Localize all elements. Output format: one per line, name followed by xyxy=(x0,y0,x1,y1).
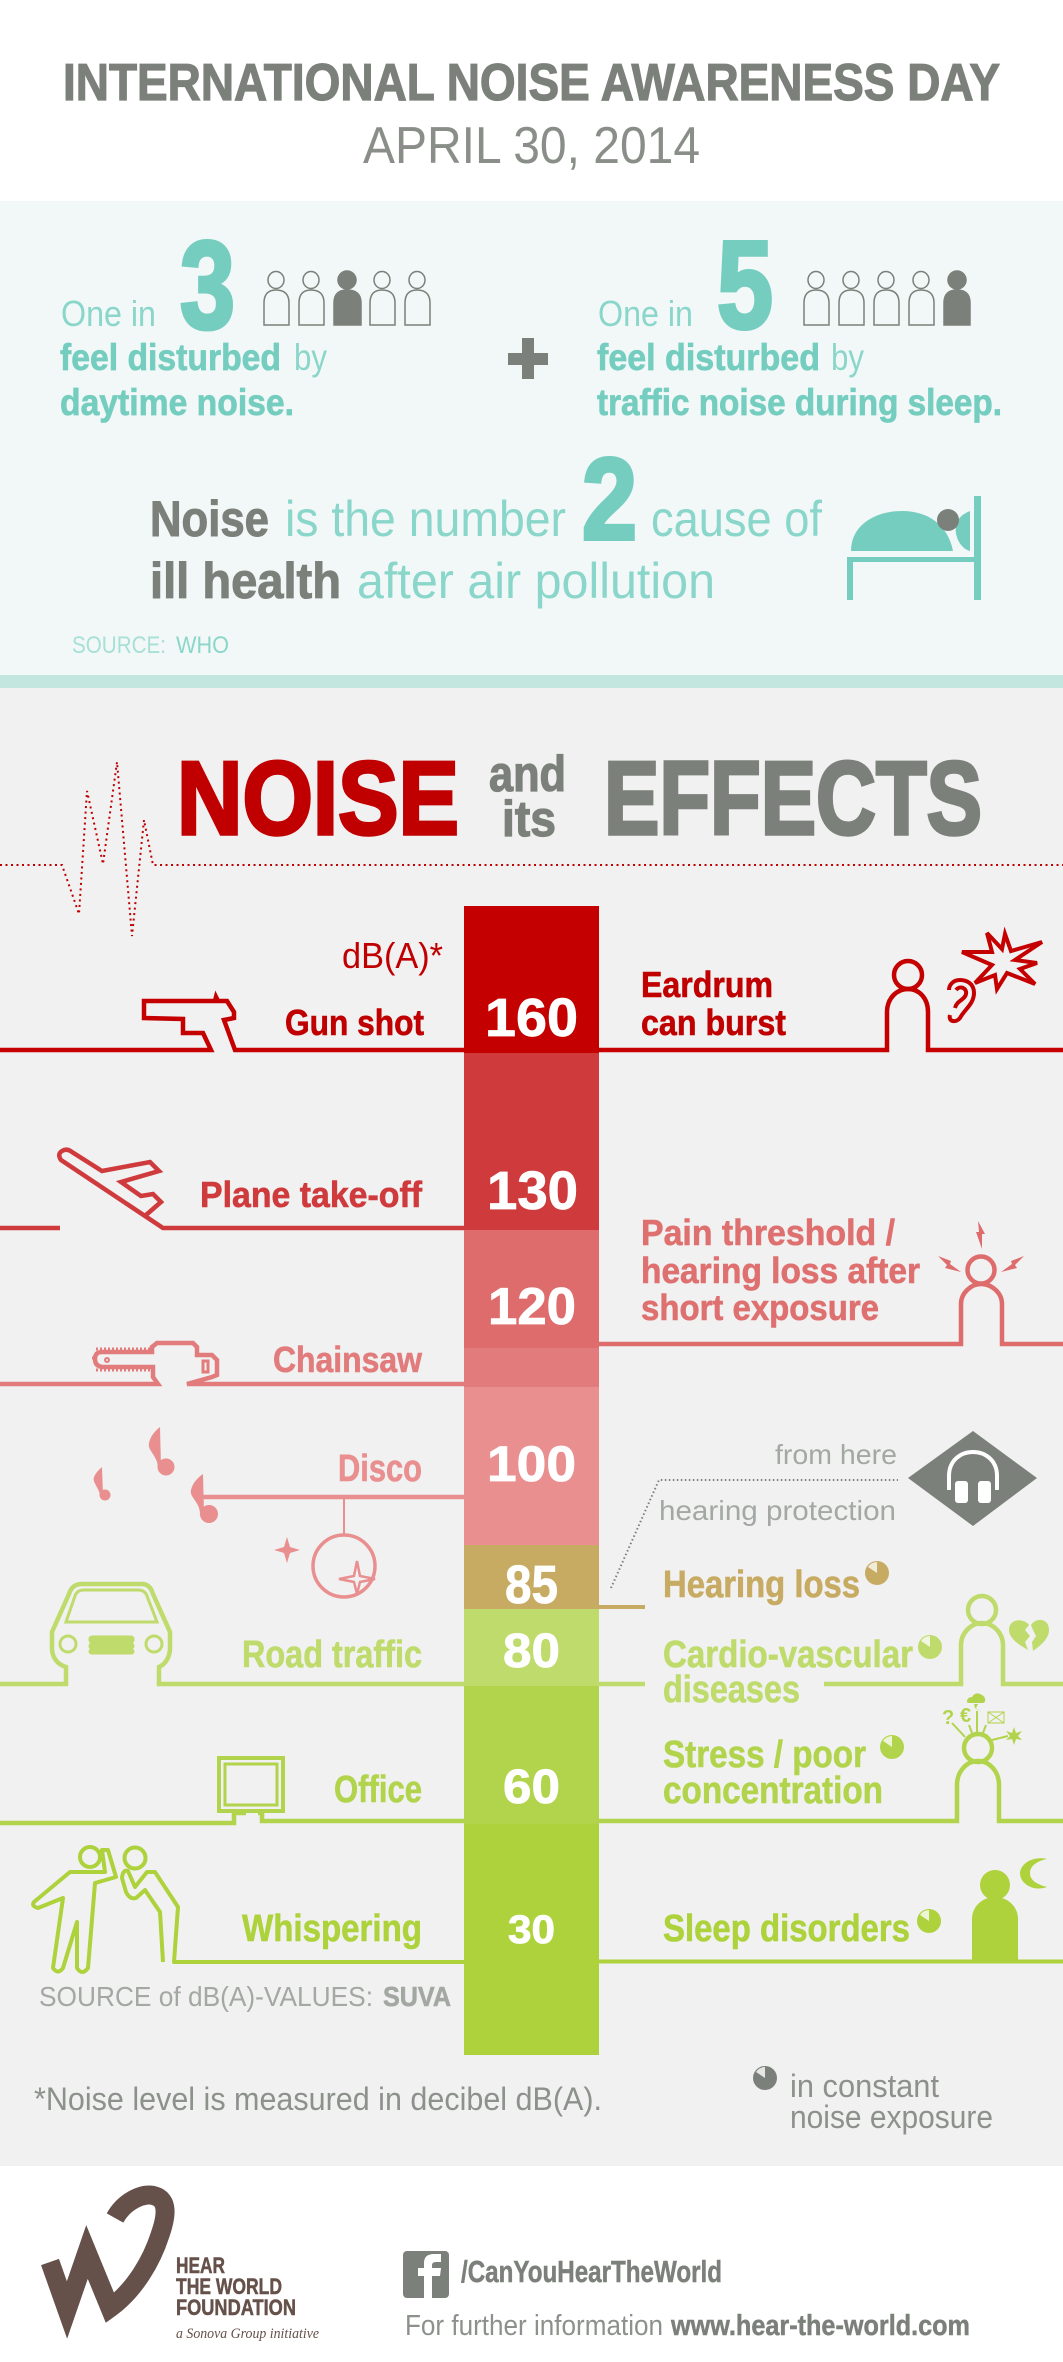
row: 60 office xyxy=(0,1693,1063,1823)
footnote: *Noise level is measured in decibel dB(A). xyxy=(34,2081,602,2117)
icon: person xyxy=(599,1596,1063,1684)
icon: music notes xyxy=(94,1427,218,1523)
icon: five people, last highlighted xyxy=(804,271,970,325)
heading: noise and its effects: and xyxy=(489,746,566,802)
row: 160 gun shot: Gun shot xyxy=(285,1002,424,1043)
row: 100 disco xyxy=(94,1427,464,1597)
icon: disco ball xyxy=(274,1535,375,1597)
icon: stressed person: € xyxy=(960,1705,971,1727)
stat: one in five: feel disturbed xyxy=(597,337,820,378)
stat: one in three: One in xyxy=(61,293,156,334)
decibel scale bar: 80 xyxy=(503,1625,560,1678)
logo: Hear the World Foundation: THE WORLD xyxy=(176,2274,282,2299)
stat: number 2 cause of ill health: cause of xyxy=(651,491,822,547)
source: SUVA: SOURCE of dB(A)-VALUES: xyxy=(39,1981,373,2012)
stat: number 2 cause of ill health xyxy=(150,434,822,609)
row: 80 road traffic xyxy=(0,1584,1063,1711)
legend: constant noise exposure: in constant xyxy=(790,2068,939,2104)
date: APRIL 30, 2014 xyxy=(363,117,700,175)
row: 60 office: concentration xyxy=(663,1770,883,1812)
row: 80 road traffic: Road traffic xyxy=(242,1634,422,1676)
decibel scale bar xyxy=(464,906,599,2055)
logo: Hear the World Foundation xyxy=(50,2195,319,2342)
panel: noise and its effects xyxy=(0,688,1063,2166)
stat: number 2 cause of ill health: Noise xyxy=(150,491,269,547)
row: 60 office: Stress / poor xyxy=(663,1734,866,1776)
source: WHO xyxy=(72,632,229,659)
heading: noise and its effects: NOISE xyxy=(177,741,459,857)
callout: hearing protection: hearing protection xyxy=(659,1495,896,1526)
source: WHO: WHO xyxy=(176,632,229,659)
icon: stressed person xyxy=(599,1693,1063,1821)
icon: gun xyxy=(0,997,464,1050)
logo: Hear the World Foundation: a Sonova Group initiative xyxy=(176,2326,319,2342)
row: 120 pain threshold: hearing loss after xyxy=(641,1250,920,1291)
icon: monitor xyxy=(0,1758,464,1823)
icon: plus xyxy=(508,338,548,379)
dotted sound wave xyxy=(0,762,1063,936)
callout: hearing protection: from here xyxy=(775,1439,897,1470)
icon: person in bed xyxy=(847,496,981,600)
heading: noise and its effects xyxy=(177,741,982,857)
icon: constant exposure dot xyxy=(917,1909,941,1933)
heading: noise and its effects: its xyxy=(502,791,556,847)
decibel scale bar: 100 xyxy=(487,1436,576,1492)
icon: car xyxy=(0,1584,464,1684)
row: 85 hearing loss: Hearing loss xyxy=(663,1564,860,1606)
further information: For further information xyxy=(405,2310,663,2342)
icon: explosion xyxy=(962,933,1042,989)
stat: one in three: by xyxy=(294,337,327,378)
row: 160 gun shot xyxy=(0,933,1063,1050)
row: 120 pain threshold: short exposure xyxy=(641,1287,879,1328)
stat: one in five: 5 xyxy=(717,217,773,355)
row: 60 office: Office xyxy=(334,1769,422,1811)
decibel scale bar: 120 xyxy=(488,1278,576,1336)
icon: facebook xyxy=(403,2251,449,2298)
social handle: /CanYouHearTheWorld xyxy=(461,2254,722,2289)
row: 160 gun shot: can burst xyxy=(641,1002,786,1043)
icon: two people whispering xyxy=(33,1847,464,1972)
icon: plane xyxy=(59,1150,464,1228)
row: 80 road traffic: Cardio-vascular xyxy=(663,1634,913,1676)
decibel scale bar: 60 xyxy=(503,1761,560,1814)
stat: one in five: traffic noise during sleep. xyxy=(597,382,1002,423)
row: 30 whispering: Whispering xyxy=(242,1908,422,1950)
icon: person with sparks xyxy=(599,1221,1063,1344)
further information: www.hear-the-world.com xyxy=(670,2310,970,2342)
decibel scale bar: 130 xyxy=(487,1161,578,1221)
icon: constant exposure dot xyxy=(880,1735,904,1759)
further information xyxy=(405,2310,970,2342)
stat: one in five xyxy=(597,217,1002,423)
footer xyxy=(50,2195,970,2342)
stat: one in three: 3 xyxy=(180,217,235,355)
icon: stressed person: ? xyxy=(942,1707,954,1729)
stat: one in three: feel disturbed xyxy=(60,337,281,378)
decibel scale bar: 30 xyxy=(508,1908,555,1952)
row: 30 whispering: Sleep disorders xyxy=(663,1908,910,1950)
stat: one in three xyxy=(60,217,327,423)
callout: hearing protection xyxy=(611,1431,1037,1588)
row: 100 disco: Disco xyxy=(338,1448,422,1490)
icon: sleeping person with moon xyxy=(599,1858,1063,1964)
unit label: dB(A)* xyxy=(342,935,443,976)
legend: constant noise exposure: noise exposure xyxy=(790,2099,993,2135)
stat: one in three: daytime noise. xyxy=(60,382,294,423)
icon: ear xyxy=(949,980,974,1021)
stat: number 2 cause of ill health: ill health xyxy=(150,553,341,609)
stat: one in five: by xyxy=(831,337,864,378)
stat: number 2 cause of ill health: is the number xyxy=(285,491,566,547)
stat: number 2 cause of ill health: 2 xyxy=(582,434,637,564)
icon: headphones xyxy=(908,1431,1037,1526)
source: SUVA: SUVA xyxy=(383,1981,451,2012)
legend: constant noise exposure xyxy=(753,2066,993,2135)
decibel scale bar: 160 xyxy=(485,988,578,1048)
header xyxy=(63,54,1000,175)
row: 80 road traffic: diseases xyxy=(663,1669,800,1711)
panel: WHO statistics xyxy=(0,201,1063,688)
row: 110 chainsaw xyxy=(0,1339,464,1384)
row: 160 gun shot: Eardrum xyxy=(641,964,773,1005)
icon: constant exposure dot xyxy=(918,1635,942,1659)
row: 85 hearing loss xyxy=(599,1431,1037,1607)
logo: Hear the World Foundation: FOUNDATION xyxy=(176,2295,296,2320)
logo: Hear the World Foundation: HEAR xyxy=(176,2253,225,2278)
row: 110 chainsaw: Chainsaw xyxy=(273,1339,423,1380)
stat: one in five: One in xyxy=(598,293,693,334)
icon: five people, one highlighted xyxy=(264,271,430,325)
row: 120 pain threshold: Pain threshold / xyxy=(641,1212,895,1253)
decibel scale bar: 85 xyxy=(505,1555,558,1615)
icon: constant exposure dot xyxy=(865,1561,889,1585)
stat: number 2 cause of ill health: after air pollution xyxy=(357,553,715,609)
row: 130 plane take-off xyxy=(0,1150,464,1228)
row: 120 pain threshold xyxy=(599,1212,1063,1344)
icon: broken heart xyxy=(1009,1620,1049,1651)
row: 130 plane take-off: Plane take-off xyxy=(200,1174,423,1215)
row: 30 whispering xyxy=(33,1847,1063,1972)
icon: person xyxy=(599,961,1063,1050)
source: WHO: SOURCE: xyxy=(72,632,166,659)
icon: chainsaw xyxy=(0,1343,464,1384)
